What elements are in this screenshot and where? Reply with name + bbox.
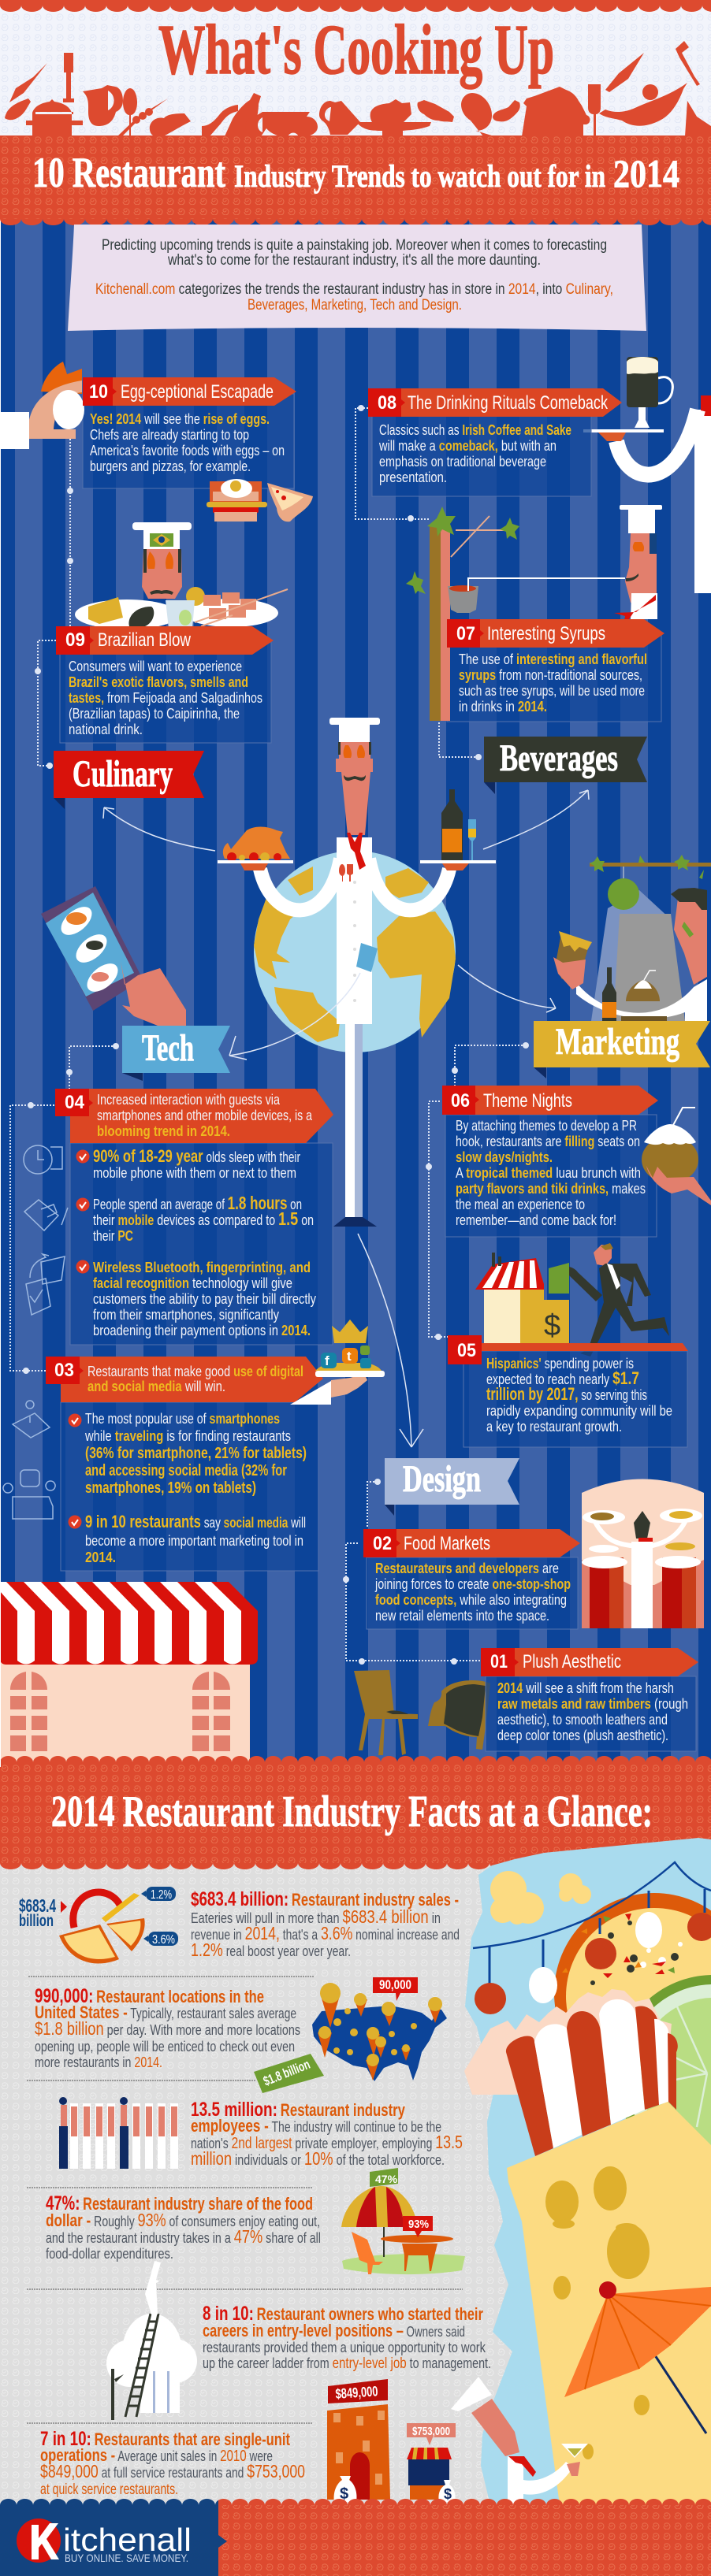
popcorn xyxy=(490,1871,591,1925)
fact: 47% xyxy=(46,2168,465,2274)
footer xyxy=(0,2499,711,2576)
banner 01 xyxy=(481,1648,698,1676)
panel: 03 digital and social media: become a more important marketing tool in xyxy=(85,1533,303,1549)
icon: pizza slice xyxy=(267,483,313,522)
fact: 8 in 10: careers in entry-level positions – Owners said xyxy=(203,2321,465,2340)
icon: patio umbrella and table: 47% xyxy=(375,2173,398,2185)
panel: 08 drinking rituals: will make a comeback, but with an xyxy=(378,438,557,454)
marketing scene xyxy=(553,855,711,1021)
panel: 06 theme nights: By attaching themes to develop a PR xyxy=(456,1118,637,1134)
tech line icons xyxy=(24,1145,68,1315)
panel: 05 hispanics xyxy=(448,1335,688,1447)
red banner band xyxy=(0,135,711,225)
fact: 990,000: $1.8 billion per day. With more and more locations xyxy=(35,2018,300,2039)
panel: 07 interesting syrups: syrups from non-traditional sources, xyxy=(459,667,642,683)
panel: 06 theme nights: slow days/nights. xyxy=(456,1149,553,1165)
panel: 04 smartphones: People spend an average of 1.8 hours on xyxy=(93,1193,302,1213)
fact: 47%: food-dollar expenditures. xyxy=(46,2246,173,2262)
restaurant storefront xyxy=(0,1582,258,1765)
icon: fork and spoon badge xyxy=(339,864,353,882)
category banner: tech xyxy=(122,1026,230,1081)
fact: 683.4 billion: revenue in 2014, that's a 3.6% nominal increase and xyxy=(191,1923,460,1943)
social tray with crown xyxy=(290,1320,385,1405)
banner 10: Egg-ceptional Escapade xyxy=(121,381,274,403)
panel: 04 smartphones: their mobile devices as compared to 1.5 on xyxy=(93,1208,314,1229)
banner 08: The Drinking Rituals Comeback xyxy=(408,392,609,414)
icon: quick service restaurant: $753,000 xyxy=(412,2425,450,2438)
social tray with crown: t xyxy=(347,1349,352,1364)
intro panel: Kitchenall.com categorizes the trends the restaurant industry has in store in 2014, into Culinary, xyxy=(95,281,613,298)
callout: 90,000: 90,000 xyxy=(379,1977,411,1992)
fact: 7 in 10: 7 in 10: Restaurants that are single-unit xyxy=(40,2428,290,2450)
panel: 10 egg-ceptional escapade: Yes! 2014 will see the rise of eggs. xyxy=(90,411,270,427)
tag: 1.8 billion xyxy=(254,2054,324,2093)
icon: store and running businessman xyxy=(475,1243,669,1357)
arrow: to marketing xyxy=(458,965,556,1012)
fact: 47%: and the restaurant industry takes in a 47% share of all xyxy=(46,2226,321,2247)
panel: 01 plush aesthetic: aesthetic), to smooth leathers and xyxy=(497,1712,668,1728)
panel: 05 hispanics: trillion by 2017, so serving this xyxy=(486,1384,647,1404)
banner 02 xyxy=(363,1529,580,1557)
panel: 07 interesting syrups: in drinks in 2014. xyxy=(459,699,547,715)
tag: 1.8 billion: $1.8 billion xyxy=(261,2057,312,2089)
panel: 09 brazilian blow: Consumers will want to experience xyxy=(69,659,242,674)
panel: 03 digital and social media: and accessing social media (32% for xyxy=(85,1462,287,1479)
dotted connectors xyxy=(10,405,529,1665)
arrow: to design xyxy=(358,1234,423,1447)
fact: 683.4 billion: Eateries will pull in more than $683.4 billion in xyxy=(191,1906,441,1927)
panel: 03 digital and social media xyxy=(46,1357,323,1571)
logo: itchenall xyxy=(63,2522,192,2558)
panel: 03 digital and social media: 9 in 10 restaurants say social media will xyxy=(85,1512,306,1531)
dotted fact separators xyxy=(27,1977,463,2423)
banner 04: blooming trend in 2014. xyxy=(97,1123,230,1139)
icon: store and running businessman: $ xyxy=(544,1309,560,1342)
panel: 09 brazilian blow: (Brazilian tapas) to Caipirinha, the xyxy=(69,706,240,722)
banner 04: smartphones and other mobile devices, is a xyxy=(97,1108,313,1123)
panel: 01 plush aesthetic: deep color tones (plush aesthetic). xyxy=(497,1728,668,1743)
icon: hand holding egg xyxy=(0,362,84,449)
panel: 10 egg-ceptional escapade: Chefs are already starting to top xyxy=(90,427,249,443)
callout: 90,000 xyxy=(373,1977,418,2001)
intro panel: what's to come for the restaurant industry, it's all the more daunting. xyxy=(167,252,541,269)
food collage xyxy=(464,1838,711,2505)
panel: 08 drinking rituals xyxy=(368,388,622,496)
fact: 683.4 billion: $683.4 xyxy=(19,1895,56,1916)
fact: 8 in 10: 8 in 10: Restaurant owners who started their xyxy=(203,2303,483,2325)
cocktail umbrella xyxy=(564,2281,711,2433)
panel: 05 hispanics: expected to reach nearly $1.7 xyxy=(486,1368,639,1388)
cheese wedge xyxy=(507,2102,711,2505)
header panel xyxy=(0,0,711,138)
fact: 47%: dollar - Roughly 93% of consumers enjoy eating out, xyxy=(46,2210,320,2230)
fries xyxy=(464,1989,672,2095)
panel: 07 interesting syrups: The use of interesting and flavorful xyxy=(459,651,647,667)
icon: full service restaurant: $ xyxy=(340,2485,348,2503)
pizza xyxy=(554,1893,711,2093)
icon: hand tapping tablet xyxy=(121,961,186,1026)
awning xyxy=(0,1582,258,1665)
panel: 05 hispanics: a key to restaurant growth. xyxy=(486,1419,622,1435)
panel: 06 theme nights: the meal an experience to xyxy=(456,1197,585,1212)
panel: 07 interesting syrups: such as tree syrups, will be used more xyxy=(459,683,645,699)
intro panel: Predicting upcoming trends is quite a painstaking job. Moreover when it comes to forecasting xyxy=(102,237,607,254)
illustration: chef with martini xyxy=(451,2377,588,2505)
category banner: culinary xyxy=(54,751,204,809)
banner 06: Theme Nights xyxy=(483,1090,572,1112)
arrow: to culinary xyxy=(103,807,215,851)
banner 07: Interesting Syrups xyxy=(487,623,605,644)
icon: full service restaurant: $849,000 xyxy=(335,2383,378,2402)
checkmark bullets xyxy=(68,1413,82,1528)
fact: 683.4 billion: billion xyxy=(19,1912,54,1930)
panel: 08 drinking rituals: Classics such as Irish Coffee and Sake xyxy=(379,422,571,438)
category banner: marketing xyxy=(534,1021,710,1078)
fact: 8 in 10: up the career ladder from entry-level job to management. xyxy=(203,2355,491,2372)
panel: 06 theme nights: party flavors and tiki drinks, makes xyxy=(456,1181,646,1197)
banner 09: 09 xyxy=(65,629,85,651)
fact: 990,000 xyxy=(35,1977,447,2093)
banner 03: 03 xyxy=(54,1360,74,1381)
category banner: beverages xyxy=(484,737,647,794)
icon: chef hat and ladder xyxy=(106,2261,197,2420)
icon: quick service restaurant xyxy=(407,2423,456,2502)
banner 10 xyxy=(83,377,296,406)
panel: 01 plush aesthetic: 2014 will see a shift from the harsh xyxy=(497,1680,674,1696)
red facts heading band xyxy=(0,1756,711,1869)
banner 07: 07 xyxy=(456,623,475,644)
icon: phone in pocket xyxy=(356,943,378,972)
striped blue background xyxy=(1,213,711,1772)
fact: 7 in 10: at quick service restaurants. xyxy=(40,2481,178,2498)
icon: plates with feijoada and skewers xyxy=(75,587,288,630)
icon: roast turkey xyxy=(218,827,293,870)
panel: 06 theme nights: remember—and come back for! xyxy=(456,1212,616,1228)
panel: 06 theme nights: hook, restaurants are filling seats on xyxy=(456,1134,640,1149)
fact: 990,000: opening up, people will be enticed to check out even xyxy=(35,2039,295,2054)
panel: 08 drinking rituals: presentation. xyxy=(379,470,447,485)
fact: 8 in 10 xyxy=(106,2261,491,2420)
banner 01: 01 xyxy=(490,1651,508,1672)
kitchen silhouettes xyxy=(5,41,711,137)
panel: 09 brazilian blow: Brazil's exotic flavors, smells and xyxy=(69,674,248,690)
logo xyxy=(17,2518,192,2564)
icon: tasting chef xyxy=(468,505,662,629)
category banner: design xyxy=(385,1458,519,1516)
banner 08 xyxy=(368,388,622,417)
icon: maple tree with bucket xyxy=(406,507,519,721)
icon: coconut drink in hand xyxy=(642,1108,711,1205)
banner 05: 05 xyxy=(457,1340,476,1361)
fact: 8 in 10: restaurants provided them a unique opportunity to work xyxy=(203,2340,486,2355)
icon: chairs xyxy=(354,1670,490,1755)
fact: 13.5 million: million individuals or 10% of the total workforce. xyxy=(191,2148,445,2169)
fact: 13.5 million xyxy=(59,2097,463,2169)
panel: 10 egg-ceptional escapade: America's favorite foods with eggs – on xyxy=(90,443,285,458)
icon: quick service restaurant: $ xyxy=(444,2486,452,2502)
panel: 03 digital and social media: smartphones, 19% on tablets) xyxy=(85,1479,256,1497)
panel: 02 food markets: food concepts, while also integrating xyxy=(375,1592,567,1608)
banner 09: Brazilian Blow xyxy=(98,629,192,651)
banner 01: Plush Aesthetic xyxy=(523,1651,621,1672)
banner 04: 04 xyxy=(65,1092,85,1113)
icon: patio umbrella and table: 93% xyxy=(408,2218,429,2231)
right chef: beverage tray xyxy=(583,357,711,593)
arrow: to tech xyxy=(229,973,360,1060)
category banner: design: Design xyxy=(403,1458,481,1500)
banner 04 xyxy=(55,1089,333,1143)
panel: 09 brazilian blow xyxy=(56,522,288,743)
intro panel: Beverages, Marketing, Tech and Design. xyxy=(248,297,462,314)
centre chef xyxy=(218,718,496,1227)
panel: 04 smartphones: mobile phone with them or next to them xyxy=(93,1165,296,1181)
panel: 06 theme nights xyxy=(442,1086,658,1237)
string of food lights xyxy=(473,1862,711,2014)
banner 07 xyxy=(447,619,664,648)
panel: 02 food markets: joining forces to create one-stop-shop xyxy=(374,1576,571,1592)
panel: 04 smartphones: customers the ability to pay their bill directly xyxy=(93,1291,316,1307)
fact: 47%: 47%: Restaurant industry share of the food xyxy=(46,2192,313,2214)
icon: crown xyxy=(332,1320,368,1343)
banner 06: 06 xyxy=(451,1090,470,1112)
facts background xyxy=(0,1859,711,2509)
checkmark bullets xyxy=(76,1150,90,1273)
panel: 10 egg-ceptional escapade: burgers and pizzas, for example. xyxy=(90,458,251,474)
fact: 683.4 billion: $683.4 billion: Restaurant industry sales - xyxy=(191,1888,459,1910)
panel: 02 food markets: Restaurateurs and developers are xyxy=(375,1561,559,1576)
icon: usa map with pins xyxy=(312,1983,447,2081)
fact: 13.5 million: nation's 2nd largest private employer, employing 13.5 xyxy=(191,2132,463,2152)
panel: 05 hispanics: rapidly expanding community will be xyxy=(486,1403,672,1419)
fact: 990,000: 990,000: Restaurant locations in the xyxy=(35,1985,264,2007)
social line icons xyxy=(3,1401,55,1519)
icon: patio umbrella and table xyxy=(341,2168,465,2274)
panel: 06 theme nights: A tropical themed luau brunch with xyxy=(456,1165,641,1181)
category banner: beverages: Beverages xyxy=(500,737,618,779)
banner 10: 10 xyxy=(89,381,108,403)
fact: 683.4 billion: 1.2% real boost year over year. xyxy=(191,1939,351,1960)
panel: 01 plush aesthetic: raw metals and raw timbers (rough xyxy=(497,1696,688,1712)
panel: 04 smartphones: their PC xyxy=(93,1228,133,1244)
banner 03: and social media will win. xyxy=(87,1379,225,1394)
banner 04: Increased interaction with guests via xyxy=(97,1092,281,1108)
panel: 07 interesting syrups xyxy=(406,505,664,722)
logo: BUY ONLINE. SAVE MONEY. xyxy=(65,2552,188,2564)
icon: bottle and glass on tray xyxy=(420,789,496,870)
fact: 7 in 10: $849,000 at full service restaurants and $753,000 xyxy=(40,2461,305,2481)
panel: 04 smartphones: 90% of 18-29 year olds sleep with their xyxy=(93,1146,300,1166)
fact: 683.4 billion xyxy=(19,1887,460,1964)
subtitle: 2014 xyxy=(613,151,679,195)
popcorn box xyxy=(506,1999,678,2156)
banner 05 xyxy=(448,1335,688,1364)
panel: 04 smartphones: broadening their payment options in 2014. xyxy=(93,1323,311,1338)
icon: beer mug xyxy=(627,357,672,407)
social tray with crown: f xyxy=(325,1353,329,1368)
icon: burger with egg xyxy=(207,479,267,522)
panel: 04 smartphones: facial recognition technology will give xyxy=(93,1275,292,1291)
fact: 7 in 10: operations - Average unit sales in 2010 were xyxy=(40,2445,273,2465)
banner 03: Restaurants that make good use of digital xyxy=(87,1364,303,1379)
fact: 990,000: more restaurants in 2014. xyxy=(35,2054,162,2070)
category banner: tech: Tech xyxy=(142,1027,194,1069)
panel: 03 digital and social media: (36% for smartphone, 21% for tablets) xyxy=(85,1445,307,1462)
icon: pizza chart xyxy=(59,1892,145,1964)
panel: 03 digital and social media: 2014. xyxy=(85,1550,116,1565)
icon: row of employees xyxy=(59,2097,178,2169)
category banner: culinary: Culinary xyxy=(73,753,173,795)
panel: 09 brazilian blow: tastes, from Feijoada and Salgadinhos xyxy=(69,690,262,706)
panel: 09 brazilian blow: national drink. xyxy=(69,722,143,737)
subtitle: Industry Trends to watch out for in xyxy=(234,158,605,194)
arrow: to beverages xyxy=(483,790,589,849)
icon: full service restaurant xyxy=(327,2379,390,2503)
panel: 03 digital and social media: while traveling is for finding restaurants xyxy=(84,1428,291,1444)
windows xyxy=(10,1672,230,1751)
fact: 990,000: United States - Typically, restaurant sales average xyxy=(35,2003,296,2022)
panel: 04 smartphones: Wireless Bluetooth, fingerprinting, and xyxy=(93,1260,311,1275)
icon: brazilian chef xyxy=(132,522,192,599)
intro panel xyxy=(68,225,646,331)
food market illustration xyxy=(582,1479,704,1628)
fact: 13.5 million: employees - The industry will continue to be the xyxy=(191,2116,441,2136)
panel: 03 digital and social media: The most popular use of smartphones xyxy=(85,1411,280,1427)
fact: 13.5 million: 13.5 million: Restaurant industry xyxy=(191,2099,406,2121)
panel: 01 plush aesthetic xyxy=(481,1648,698,1751)
globe xyxy=(254,851,456,1052)
banner 09 xyxy=(56,626,274,655)
panel: 08 drinking rituals: emphasis on traditional beverage xyxy=(379,454,546,470)
panel: 02 food markets: new retail elements into the space. xyxy=(375,1608,549,1624)
banner 02: Food Markets xyxy=(404,1533,490,1554)
lime xyxy=(615,1975,711,2172)
banner 06 xyxy=(442,1086,658,1115)
banner 03 xyxy=(46,1357,323,1402)
panel: 05 hispanics: Hispanics' spending power is xyxy=(486,1356,634,1372)
subtitle xyxy=(32,149,679,196)
fact: 683.4 billion: 1.2% xyxy=(151,1888,172,1902)
icon: tablet with menu xyxy=(41,886,186,1026)
banner 02: 02 xyxy=(373,1533,392,1554)
subtitle: 10 Restaurant xyxy=(32,149,225,196)
panel: 02 food markets xyxy=(363,1529,580,1629)
fact: 7 in 10 xyxy=(40,2379,456,2503)
panel: 04 smartphones xyxy=(55,1089,333,1345)
fact: 683.4 billion: 3.6% xyxy=(152,1933,175,1947)
banner 08: 08 xyxy=(378,392,396,414)
panel: 04 smartphones: from their smartphones, significantly xyxy=(93,1307,279,1323)
panel: 10 egg-ceptional escapade xyxy=(0,362,313,522)
